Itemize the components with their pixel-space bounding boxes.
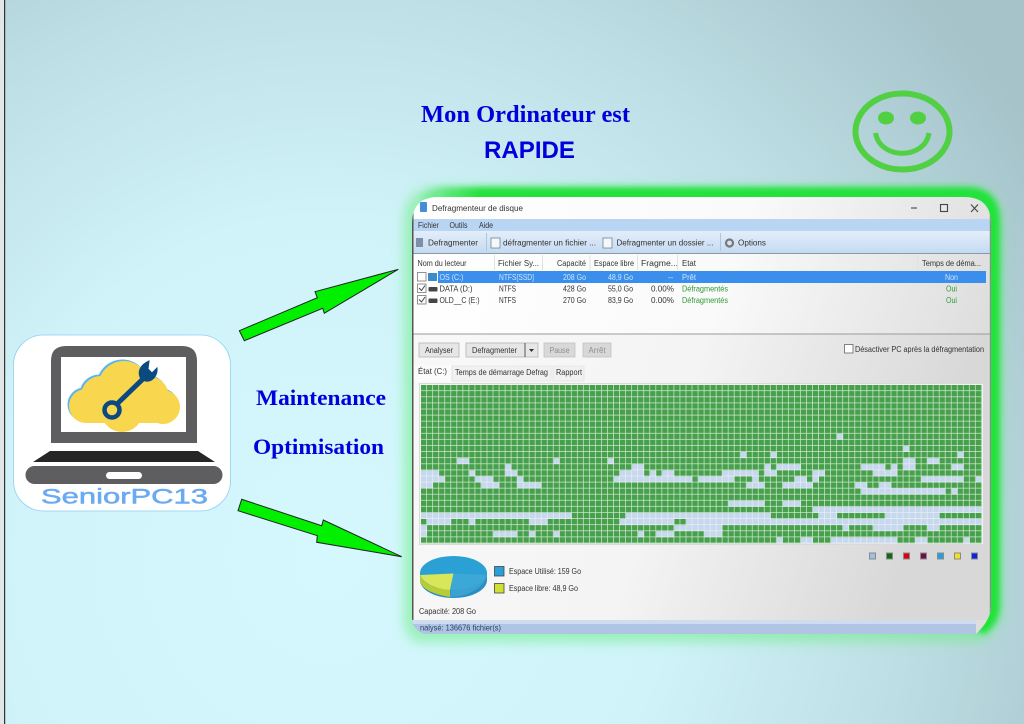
arrow: to window bottom — [238, 499, 402, 557]
action buttons: Defragmenter — [472, 346, 517, 355]
icon: laptop screen — [51, 346, 197, 443]
logo text: SeniorPC13 — [41, 486, 208, 508]
panel: disk cluster map — [420, 384, 984, 544]
drive row: OLD: OLD__C (E:) — [440, 296, 480, 305]
pie legend: Espace libre: 48,9 Go — [509, 584, 578, 593]
icon: smiley — [856, 94, 950, 170]
drive row: DATA: Oui — [946, 284, 957, 294]
status text: nalysé: 136676 fichier(s) — [420, 624, 501, 632]
tabs: Temps de démarrage Defrag — [455, 368, 548, 377]
drive list headers: Fichier Sy... — [498, 259, 539, 268]
menu bar — [412, 219, 991, 231]
pale glow around window — [404, 188, 1002, 642]
window title: Defragmenteur de disque — [432, 204, 524, 213]
drive row: DATA: 0.00% — [651, 284, 674, 294]
drive row: OS — [418, 272, 958, 282]
drive list headers: Capacité — [557, 259, 587, 268]
arrow: to window top — [239, 269, 398, 341]
icon: laptop base — [33, 451, 215, 462]
drive list headers: Temps de déma... — [922, 259, 981, 268]
icon: wrench — [104, 361, 157, 418]
drive row: OLD: 0.00% — [651, 296, 674, 305]
drive list headers: Etat — [682, 259, 697, 268]
pie legend: Espace Utilisé: 159 Go — [509, 567, 581, 576]
drive list headers: Fragme... — [641, 259, 678, 268]
drive list headers — [418, 255, 981, 270]
drive list headers: Espace libre — [594, 259, 634, 268]
toolbar buttons — [416, 233, 766, 251]
title: Mon Ordinateur est: Mon Ordinateur est — [421, 102, 630, 128]
drive row: OS: 208 Go — [563, 273, 586, 282]
toolbar buttons: Defragmenter — [428, 238, 478, 248]
drive row: OLD: 270 Go — [563, 296, 586, 305]
drive list headers: Nom du lecteur — [418, 259, 467, 268]
drive row: OLD: Défragmentés — [682, 296, 728, 305]
title: RAPIDE: RAPIDE — [484, 137, 575, 164]
status bar — [412, 620, 976, 634]
action buttons: Arrêt — [588, 346, 606, 355]
menu: Aide — [479, 221, 493, 230]
control band — [412, 334, 991, 620]
drive row: OS: Non — [945, 273, 958, 282]
tabs — [414, 365, 584, 381]
pie legend — [494, 566, 581, 593]
capacity label: Capacité: 208 Go — [419, 607, 477, 616]
window buttons — [911, 204, 978, 212]
strong green glow top and right — [420, 187, 1000, 634]
drive row: OS: -- — [668, 273, 674, 282]
drive row: OLD: NTFS — [499, 296, 516, 305]
toolbar — [412, 231, 991, 253]
drive row: DATA: 55,0 Go — [608, 284, 633, 294]
toolbar buttons: Defragmenter un dossier ... — [616, 238, 714, 248]
drive row: OS: Prêt — [682, 273, 697, 282]
tabs: Rapport — [556, 368, 583, 377]
drive row: OS: NTFS[SSD] — [499, 273, 534, 282]
pie chart — [420, 556, 487, 598]
drive row: OS: OS (C:) — [440, 273, 464, 282]
drive row: DATA: Défragmentés — [682, 284, 728, 294]
menu — [418, 221, 493, 230]
label: Optimisation: Optimisation — [253, 434, 384, 459]
panel: disk defragmenter window — [412, 197, 991, 634]
selected row — [438, 271, 986, 283]
drive row: DATA: NTFS — [499, 284, 516, 294]
menu: Outils — [450, 221, 468, 230]
drive row: DATA: DATA (D:) — [440, 284, 473, 294]
action buttons — [419, 343, 611, 357]
drive row: DATA — [418, 284, 957, 294]
drive row: OLD: 83,9 Go — [608, 296, 633, 305]
tabs: État (C:) — [418, 367, 447, 376]
logo: SeniorPC13 — [14, 335, 230, 511]
drive row: OLD — [418, 296, 957, 305]
cluster legend — [870, 553, 978, 559]
toolbar buttons: Options — [738, 238, 766, 248]
drive row: DATA: 428 Go — [563, 284, 586, 294]
action buttons: Analyser — [425, 346, 453, 355]
toolbar buttons: défragmenter un fichier ... — [503, 238, 596, 248]
shutdown checkbox: Désactiver PC après la défragmentation — [855, 345, 984, 354]
menu: Fichier — [418, 221, 439, 230]
drive row: OS: 48,9 Go — [608, 273, 633, 282]
action buttons: Pause — [550, 346, 570, 355]
label: Maintenance: Maintenance — [256, 385, 386, 410]
drive row: OLD: Oui — [946, 296, 957, 305]
icon: cloud — [68, 360, 180, 432]
